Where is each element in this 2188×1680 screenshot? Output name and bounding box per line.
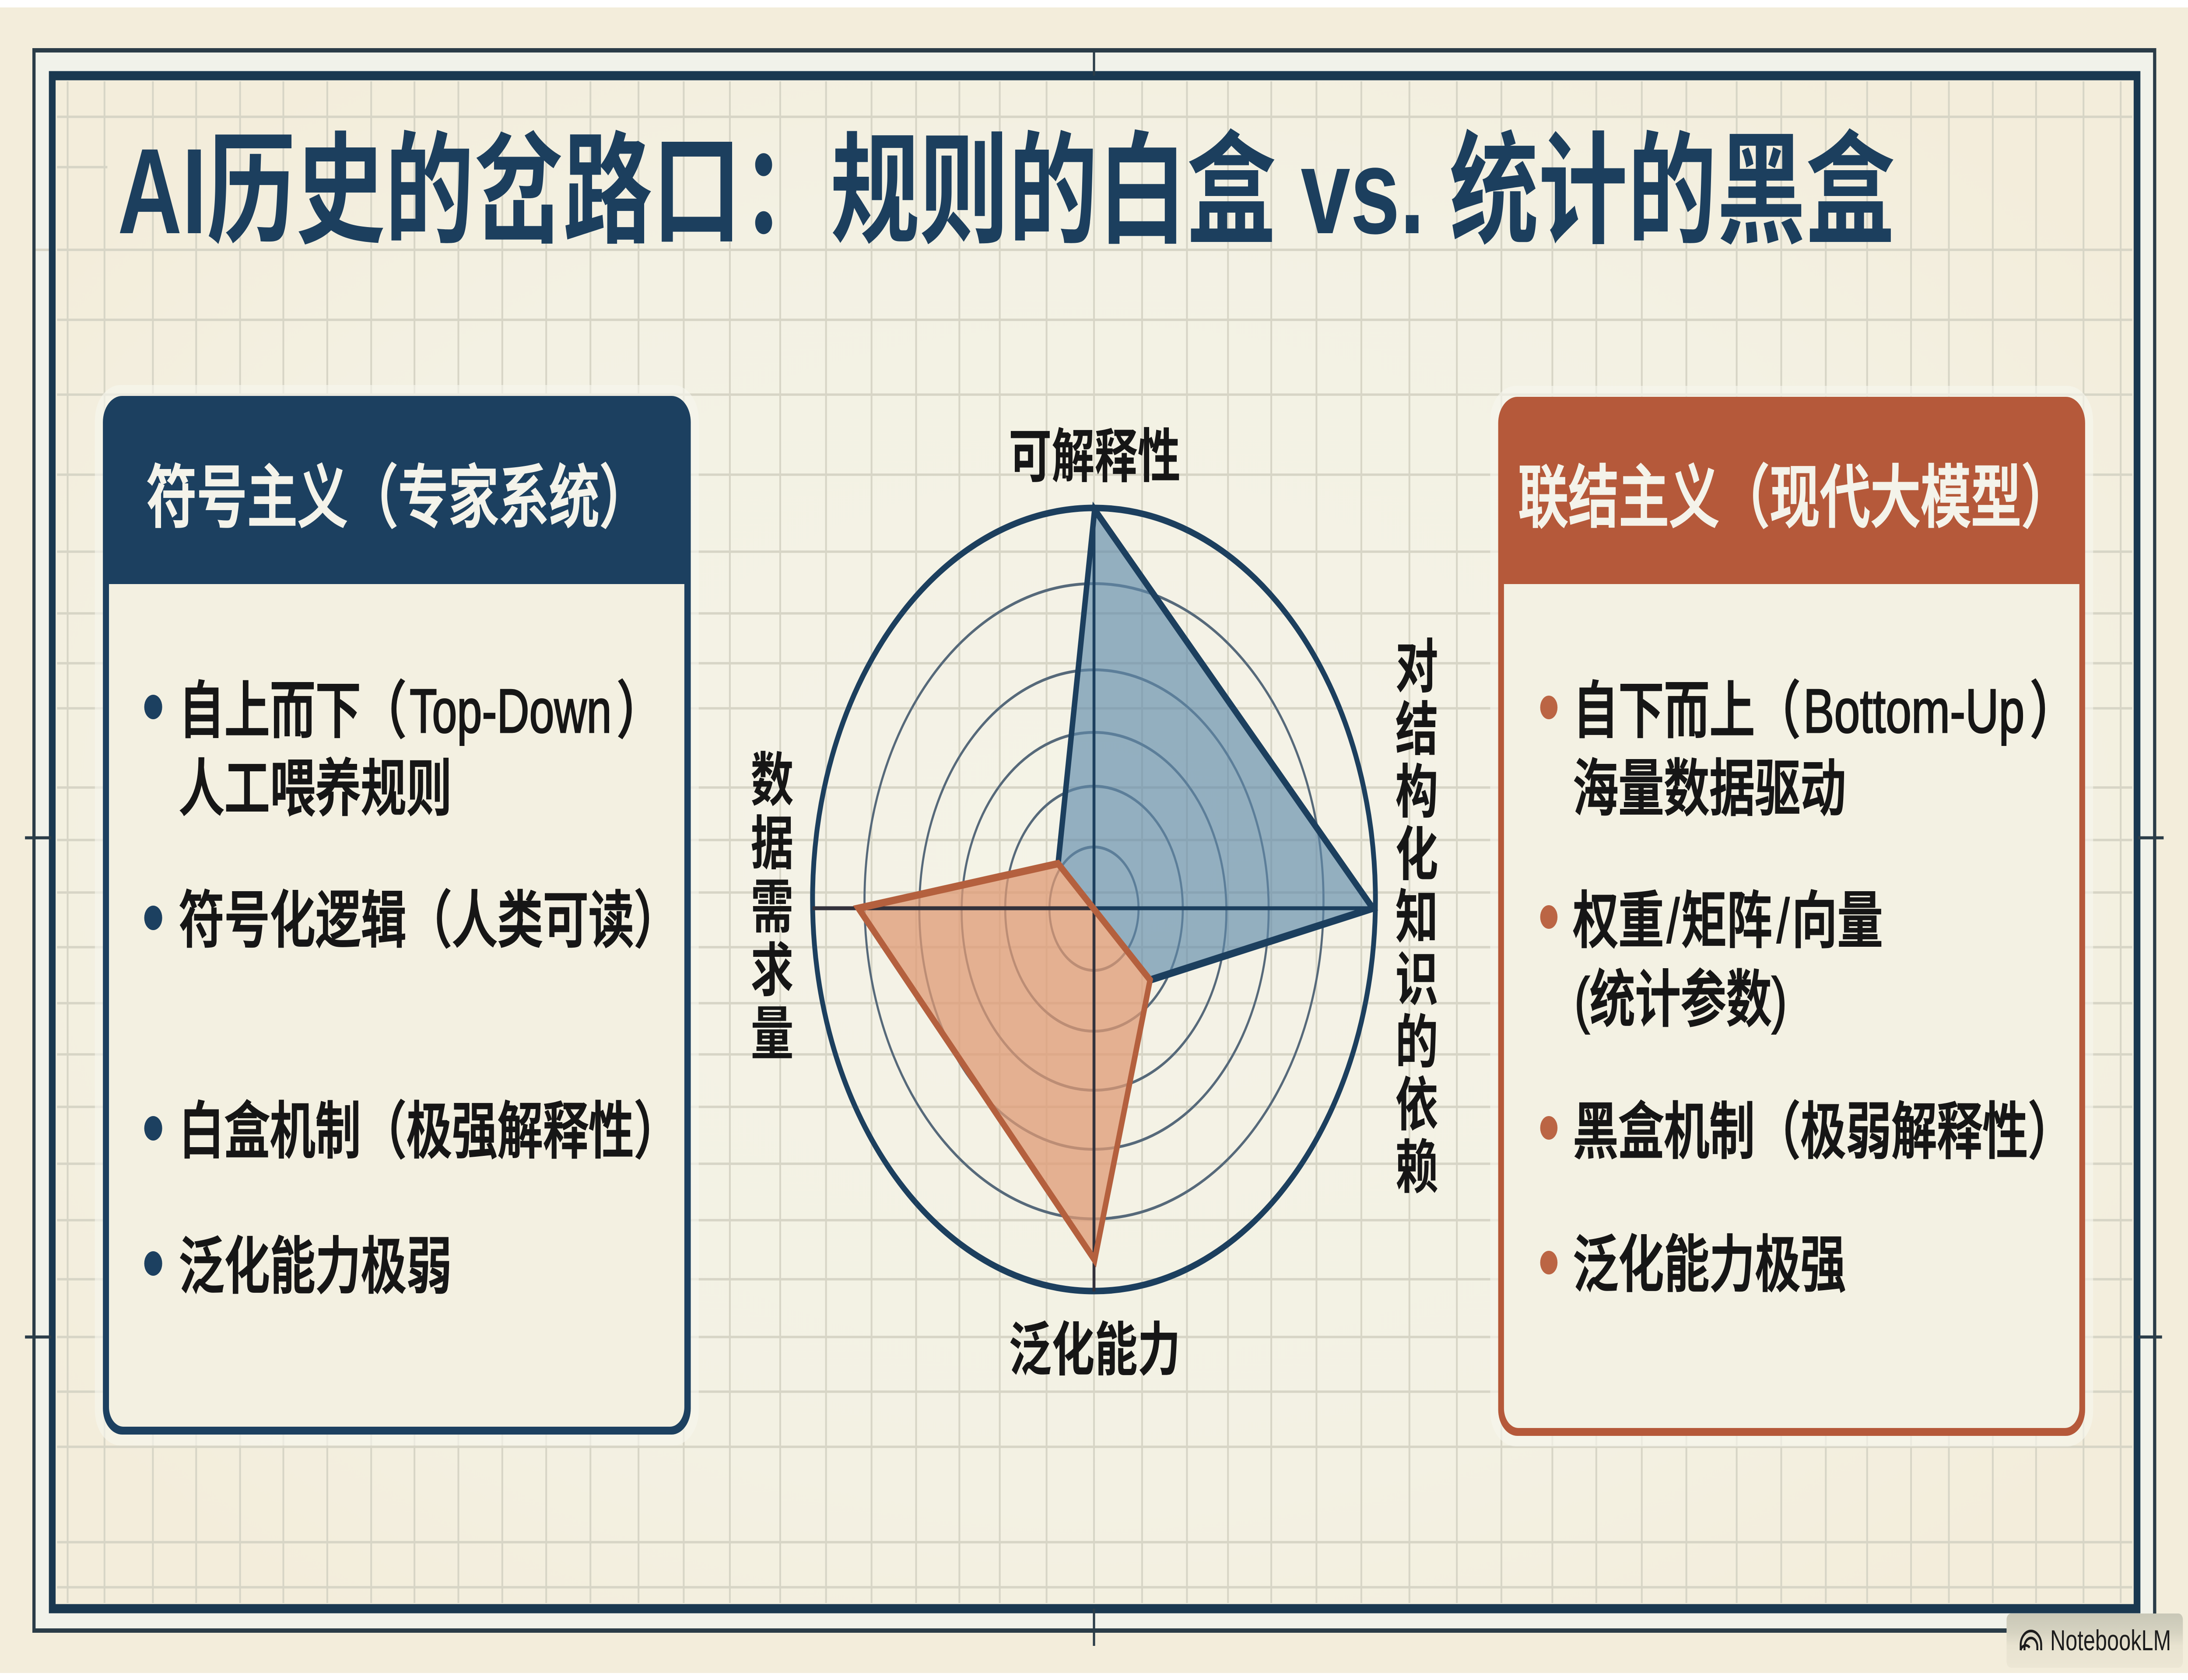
panel frame and header fill [1498, 397, 2085, 1436]
bullet: bottom-up: 海量数据驱动 [1573, 754, 1846, 824]
series outline: connectionism [859, 864, 1150, 1260]
panel body [109, 584, 684, 1427]
bullet: weights, matrices, vectors: 权重 [1573, 886, 1664, 956]
bullet: top-down: 人工喂养规则 [179, 754, 452, 824]
bullet: strong generalization: 泛化能力极强 [1573, 1230, 1846, 1300]
bullet: weights, matrices, vectors: / [1777, 886, 1789, 956]
bullet: top-down: 自上而下（ [179, 676, 407, 746]
bullet: bottom-up [1540, 676, 2076, 824]
bullet: bottom-up: 自下而上（ [1573, 676, 1800, 746]
watermark: NotebookLM [2006, 1614, 2183, 1668]
series fill: connectionism [859, 864, 1150, 1260]
panel: symbolism (expert systems) [95, 385, 699, 1446]
bullet: weights, matrices, vectors [1540, 886, 1883, 1035]
axis label: data requirement: 数据需求量 [750, 748, 794, 1067]
panel heading: 符号主义（专家系统） [147, 460, 650, 536]
radar background rings [865, 584, 1323, 1219]
bullet: top-down: Top-Down [410, 676, 612, 746]
series outline: symbolism [1058, 510, 1373, 980]
bullet: weights, matrices, vectors: 向量 [1792, 886, 1883, 956]
bullet: bottom-up: ） [2030, 676, 2076, 746]
axis label: generalization: 泛化能力 [1009, 1317, 1181, 1383]
bullet: weights, matrices, vectors: / [1667, 886, 1680, 956]
panel heading: 联结主义（现代大模型） [1518, 460, 2072, 536]
icon: NotebookLM arcs [2021, 1631, 2041, 1650]
bullet: top-down: ） [617, 676, 662, 746]
bullet: black box: 黑盒机制（极弱解释性） [1573, 1097, 2073, 1167]
watermark: NotebookLM: NotebookLM [2050, 1625, 2171, 1657]
series fill: symbolism [1058, 510, 1373, 980]
bullet: top-down [144, 676, 662, 824]
radar axes [813, 508, 1376, 1292]
radar outer ring [813, 508, 1375, 1291]
bullet: symbolic logic: 符号化逻辑（人类可读） [179, 886, 680, 956]
axis label: interpretability: 可解释性 [1009, 424, 1181, 490]
radar chart [750, 424, 1438, 1383]
bullet: weights, matrices, vectors: (统计参数) [1574, 965, 1787, 1035]
bullet: weak generalization: 泛化能力极弱 [179, 1232, 452, 1302]
panel frame and header fill [103, 396, 691, 1435]
bullet: bottom-up: Bottom-Up [1803, 676, 2024, 746]
title: AI历史的岔路口：规则的白盒 vs. 统计的黑盒 [118, 123, 1895, 259]
bullet: weights, matrices, vectors: 矩阵 [1681, 886, 1772, 956]
panel: connectionism (modern large models) [1490, 386, 2093, 1446]
panel body [1504, 584, 2079, 1428]
axis label: reliance on structured knowledge: 对结构化知识的依赖 [1396, 634, 1438, 1200]
bullet: white box: 白盒机制（极强解释性） [179, 1097, 680, 1166]
